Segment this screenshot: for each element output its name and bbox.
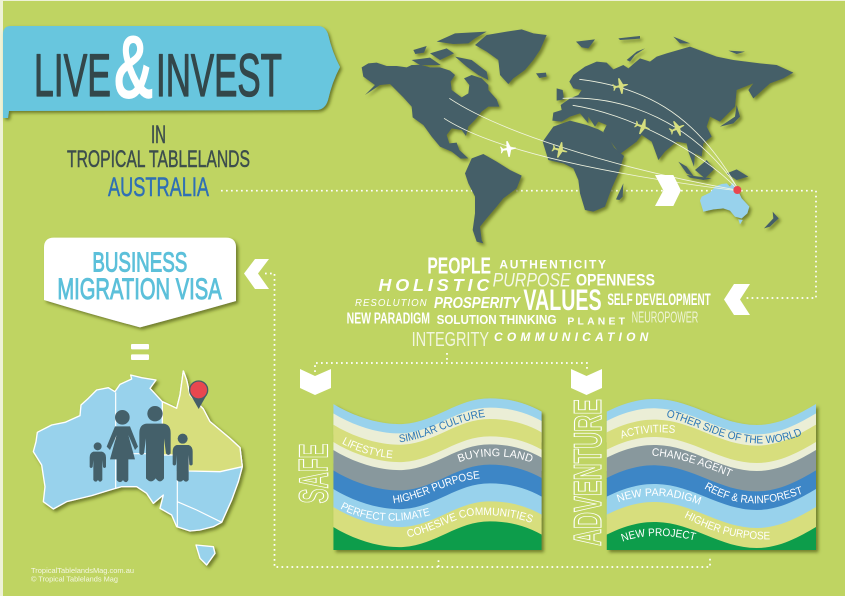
adventure labels: OTHER SIDE OF THE WORLD [667,410,801,444]
map pin [190,381,208,409]
footer credit: © Tropical Tablelands Mag [31,574,118,584]
airplanes [499,77,688,160]
business migration visa callout: MIGRATION VISA [57,273,222,306]
adventure heading: ADVENTURE [567,399,610,546]
dotted connector: values to panels [315,353,587,372]
adventure labels [616,410,801,542]
safe labels: COHESIVE COMMUNITIES [407,508,533,537]
adventure labels: REEF & RAINFOREST [704,482,801,504]
adventure labels: NEW PROJECT [621,528,696,542]
equals sign [131,344,149,360]
safe labels [340,409,533,537]
adventure labels: HIGHER PURPOSE [684,510,770,540]
chevron: left to visa [244,259,269,289]
safe labels: PERFECT CLIMATE [340,502,430,521]
word cloud: VALUES [523,284,602,317]
title banner [3,18,340,118]
panel: safe waves [333,398,546,554]
family figures [90,406,193,482]
safe labels: BUYING LAND [457,448,532,462]
title text: live and invest: INVEST [156,42,282,109]
word cloud: OPENNESS [576,271,655,290]
panel: adventure waves [606,399,820,554]
title text: live and invest [34,18,282,118]
safe labels: HIGHER PURPOSE [393,470,480,504]
safe labels: SIMILAR CULTURE [399,409,485,442]
chevron: down to safe [300,369,331,395]
subtitle: location [67,121,250,202]
adventure labels: NEW PARADIGM [616,488,702,504]
small child [90,442,106,482]
man [139,406,171,481]
flight paths [444,79,737,191]
word cloud: PURPOSE [493,271,572,292]
safe labels: LIFESTYLE [342,437,393,458]
chevron: down to adventure [571,369,602,395]
subtitle: location: AUSTRALIA [108,172,209,202]
word cloud: RESOLUTION [355,298,427,309]
chevron: left to values [724,284,750,315]
word cloud: COMMUNICATION [494,330,649,344]
word cloud [347,252,711,351]
word cloud: PEOPLE [427,252,491,278]
Queensland [162,371,242,472]
word cloud: SOLUTION [437,312,497,327]
adventure labels: CHANGE AGENT [652,448,733,476]
boy [173,434,193,482]
subtitle: location: TROPICAL TABLELANDS [67,146,250,173]
word cloud: NEUROPOWER [632,310,698,327]
dotted connector: Australia to values [221,191,816,298]
title text: live and invest: & [113,18,154,118]
word cloud: PROSPERITY [434,295,522,312]
business migration visa callout [33,238,242,565]
woman [107,410,138,482]
word cloud: AUTHENTICITY [499,257,606,271]
world map [362,29,793,243]
title text: live and invest: LIVE [34,42,111,109]
word cloud: THINKING [499,312,557,327]
word cloud: INTEGRITY [412,328,489,351]
business migration visa callout: BUSINESS [92,247,187,278]
footer credit [31,566,134,584]
chevron: right [655,175,681,206]
dotted connector: visa to panels [265,274,710,567]
word cloud: HOLISTIC [378,275,490,295]
word cloud: NEW PARADIGM [347,310,430,327]
word cloud: SELF DEVELOPMENT [607,290,711,309]
footer credit: TropicalTablelandsMag.com.au [31,566,134,575]
adventure labels: ACTIVITIES [622,424,675,439]
subtitle: location: IN [151,121,166,149]
word cloud: PLANET [567,316,626,327]
location dot [733,186,741,194]
Australia on map [700,183,749,224]
Australia map [33,371,242,565]
safe heading: SAFE [290,444,336,504]
